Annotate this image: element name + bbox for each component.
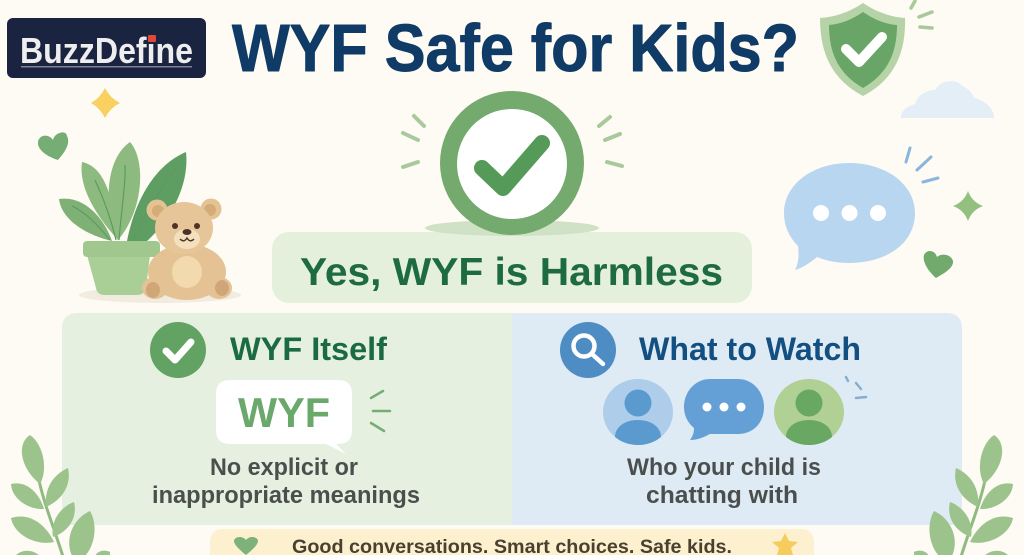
illustration: left branch bbox=[11, 435, 110, 555]
logo: BuzzDefine: BuzzDefine bbox=[20, 30, 193, 71]
text: who your child is chatting with: Who your child is bbox=[627, 454, 821, 481]
icon: green heart left bbox=[38, 132, 68, 160]
illustration: right branch bbox=[914, 435, 1013, 555]
text: no explicit meanings: No explicit or bbox=[210, 454, 358, 481]
text: who your child is chatting with: chatting with bbox=[646, 482, 798, 509]
icon: star bbox=[772, 533, 798, 555]
icon: check badge bbox=[150, 322, 206, 378]
teddy bear bbox=[142, 198, 232, 300]
icon: shield with check bbox=[820, 1, 932, 96]
icon: chat bubble bbox=[684, 379, 764, 440]
banner: Yes, WYF is Harmless bbox=[272, 232, 752, 303]
icon: blue avatar bbox=[603, 379, 673, 445]
illustration: plant and teddy bear bbox=[59, 142, 241, 303]
WYF speech bubble: WYF bbox=[238, 389, 330, 436]
icon: cloud bbox=[901, 81, 994, 118]
icon: heart bbox=[234, 537, 258, 555]
banner: Yes, WYF is Harmless: Yes, WYF is Harmless bbox=[300, 251, 723, 294]
heading: WYF Itself: WYF Itself bbox=[230, 331, 387, 367]
icon: magnifier badge bbox=[560, 322, 616, 378]
icon: green avatar bbox=[774, 377, 866, 445]
heading: What to Watch: What to Watch bbox=[639, 331, 861, 367]
text: no explicit meanings bbox=[152, 454, 420, 509]
text: no explicit meanings: inappropriate meanings bbox=[152, 482, 420, 509]
panel: WYF Itself bbox=[62, 313, 512, 525]
text: who your child is chatting with bbox=[627, 454, 821, 509]
panel: What to Watch bbox=[512, 313, 962, 525]
logo: BuzzDefine bbox=[7, 18, 206, 78]
banner: closing message bbox=[210, 529, 814, 555]
icon: green sparkle bbox=[953, 191, 983, 221]
icon: green heart right bbox=[924, 251, 953, 278]
icon: yellow sparkle bbox=[91, 88, 120, 118]
title: WYF Safe for Kids? bbox=[232, 11, 799, 86]
WYF speech bubble bbox=[216, 380, 390, 454]
icon: large check circle bbox=[403, 91, 622, 236]
icon: large chat bubble bbox=[784, 148, 938, 270]
